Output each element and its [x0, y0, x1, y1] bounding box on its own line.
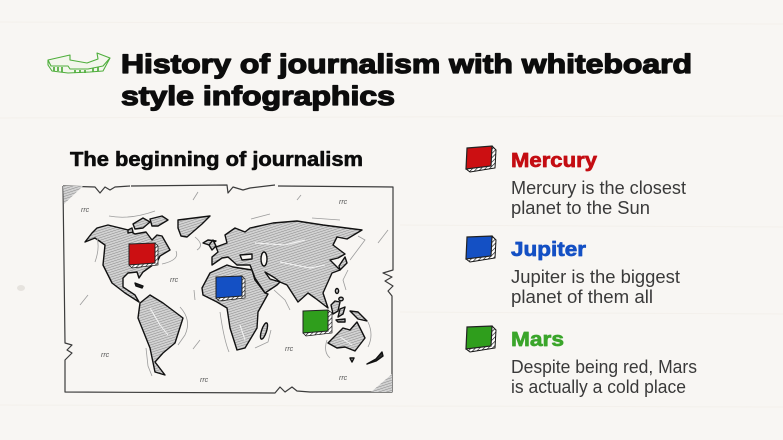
Madagascar — [259, 322, 269, 340]
heading: Jupiter: Jupiter — [511, 239, 586, 261]
sea wave marks: rrc — [170, 277, 179, 284]
icon: blue box — [466, 236, 496, 262]
title: History of journalism with whiteboard — [121, 49, 692, 79]
Greenland — [178, 216, 210, 237]
sea wave marks: rrc — [101, 352, 110, 359]
sea wave marks — [81, 199, 348, 384]
Arctic islands — [133, 218, 150, 229]
text: Jupiter description: Jupiter is the biggest — [511, 267, 680, 287]
text: Mercury description: planet to the Sun — [511, 198, 650, 218]
Tasmania and New Zealand — [350, 358, 354, 362]
heading: Mercury: Mercury — [511, 150, 598, 172]
red marker on map — [129, 243, 158, 268]
hatched map corners — [63, 186, 83, 204]
text: Mars description — [511, 357, 697, 397]
Persian Gulf — [265, 272, 280, 282]
sea wave marks: rrc — [200, 377, 209, 384]
map frame — [63, 185, 393, 393]
text: Mercury description: Mercury is the closest — [511, 178, 686, 198]
title — [121, 49, 692, 111]
Cuba — [135, 283, 143, 288]
Black Sea — [240, 254, 252, 260]
Australia — [328, 322, 365, 351]
Iceland and UK — [203, 240, 216, 245]
Africa — [202, 265, 268, 350]
subheading: the beginning of journalism: The beginning of journalism — [70, 149, 363, 171]
text: Mercury description — [511, 178, 686, 218]
blue marker on map — [216, 276, 245, 301]
title: style infographics — [121, 81, 395, 111]
Caspian Sea — [261, 252, 267, 266]
legend: Mercury — [466, 146, 686, 218]
sea wave marks: rrc — [339, 199, 348, 206]
icon: green box — [466, 326, 496, 352]
sea wave marks: rrc — [339, 375, 348, 382]
Southeast Asian islands — [331, 301, 340, 314]
Japan — [339, 257, 347, 270]
legend: Mars — [466, 326, 697, 397]
text: Mars description: is actually a cold place — [511, 377, 686, 397]
text: Jupiter description — [511, 267, 680, 307]
world map — [63, 185, 393, 393]
text: Mars description: Despite being red, Mars — [511, 357, 697, 377]
icon: red box — [466, 146, 496, 172]
South America — [138, 295, 183, 375]
sea wave marks: rrc — [81, 207, 90, 214]
heading: Mars: Mars — [511, 329, 564, 351]
New Guinea — [350, 311, 367, 321]
icon: green arrow — [48, 53, 110, 73]
legend: Jupiter — [466, 236, 680, 307]
Eurasia — [212, 221, 362, 308]
ocean current strokes — [80, 192, 388, 376]
sea wave marks: rrc — [285, 346, 294, 353]
text: Jupiter description: planet of them all — [511, 287, 653, 307]
land highlights — [150, 240, 352, 345]
green marker on map — [303, 310, 332, 336]
North America — [85, 225, 170, 302]
continents — [85, 216, 383, 375]
